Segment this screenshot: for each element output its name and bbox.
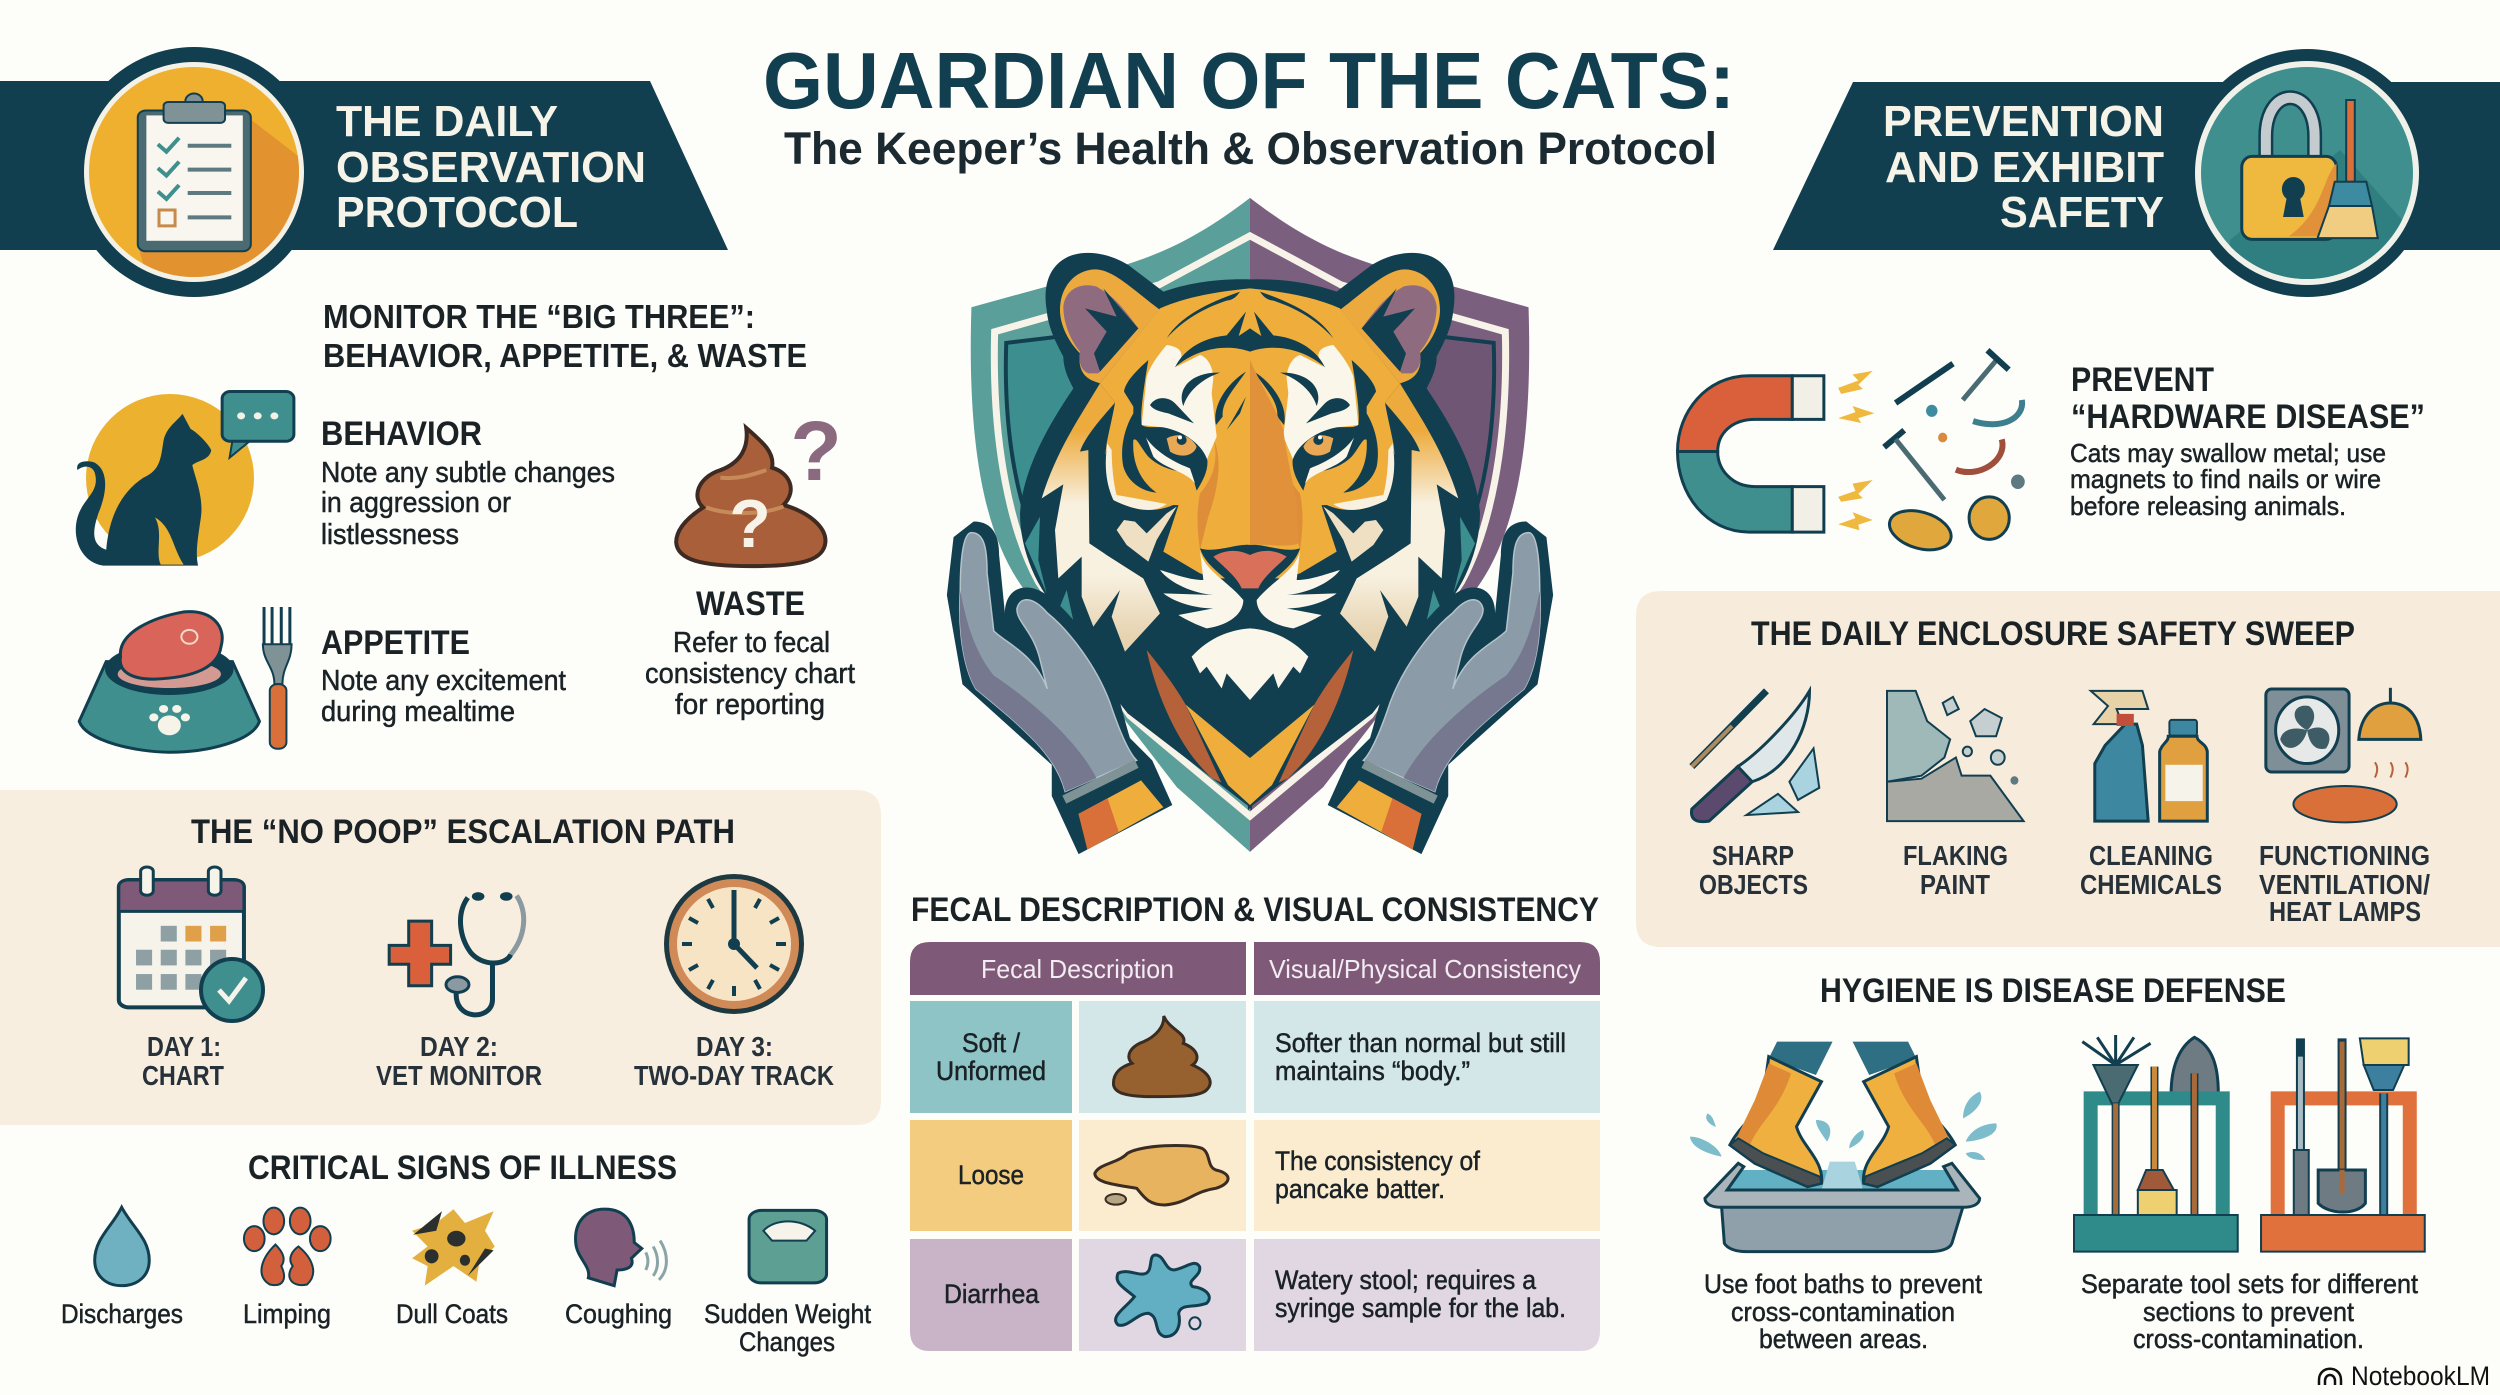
row: soft unformed: Soft / <box>962 1028 1020 1058</box>
icon: cat with speech bubble <box>76 392 294 566</box>
icon: waste pile with question marks <box>676 404 842 566</box>
table header: Visual/Physical Consistency <box>1269 954 1581 984</box>
notebooklm logo: NotebookLM <box>2351 1361 2490 1391</box>
text block: separate tool sets: cross-contamination. <box>2133 1324 2364 1354</box>
heading: escalation path: THE “NO POOP” ESCALATION PATH <box>191 813 735 851</box>
row: loose: Loose <box>958 1160 1024 1190</box>
shield <box>971 198 1529 852</box>
text block: waste <box>645 585 855 721</box>
text block: foot baths: Use foot baths to prevent <box>1704 1269 1982 1299</box>
row: diarrhea <box>910 1239 1600 1351</box>
text block: foot baths <box>1704 1269 1982 1354</box>
text block: behavior <box>321 415 615 551</box>
row: soft unformed: Softer than normal but still <box>1275 1028 1566 1058</box>
title <box>763 36 1735 174</box>
label: day 2 <box>376 1031 542 1091</box>
banner: prevention and exhibit safety <box>1773 49 2500 300</box>
heading: safety sweep: THE DAILY ENCLOSURE SAFETY SWEEP <box>1751 615 2355 653</box>
labels: illness signs: Discharges <box>61 1299 183 1329</box>
row: loose: pancake batter. <box>1275 1174 1445 1204</box>
title: GUARDIAN OF THE CATS: <box>763 36 1735 125</box>
label: day 3 <box>634 1031 834 1091</box>
teal tool rack <box>2074 1035 2238 1252</box>
heading: monitor the big three: MONITOR THE “BIG THREE”: <box>323 298 755 335</box>
labels: illness signs: Coughing <box>565 1299 672 1329</box>
text block: waste: consistency chart <box>645 658 855 690</box>
banner: prevention and exhibit safety: SAFETY <box>2000 188 2164 237</box>
icon: clipboard <box>138 94 251 251</box>
label: ventilation: HEAT LAMPS <box>2269 896 2421 927</box>
text block: prevent hardware disease: before releasing animals. <box>2070 491 2346 521</box>
icon: limping paw <box>244 1208 331 1285</box>
text block: waste: Refer to fecal <box>673 627 830 659</box>
text block: prevent hardware disease: PREVENT <box>2071 361 2214 399</box>
label: sharp objects: SHARP <box>1712 840 1794 871</box>
text block: separate tool sets <box>2081 1269 2418 1354</box>
text block: prevent hardware disease: magnets to find nails or wire <box>2070 464 2381 494</box>
row: loose: The consistency of <box>1275 1146 1480 1176</box>
icon: loose stool <box>1095 1145 1228 1205</box>
label: day 1: DAY 1: <box>147 1031 221 1062</box>
text block: appetite: during mealtime <box>321 696 515 728</box>
icon: meat in bowl and fork <box>79 607 292 752</box>
banner: prevention and exhibit safety: PREVENTION <box>1883 97 2164 146</box>
label: day 1 <box>142 1031 224 1091</box>
gloved hand <box>947 521 1172 854</box>
icon: discharge drop <box>95 1207 149 1286</box>
tiger half <box>947 253 1250 854</box>
icon: dull coat <box>412 1209 495 1286</box>
text block: behavior: Note any subtle changes <box>321 457 615 489</box>
label: day 3: TWO-DAY TRACK <box>634 1060 834 1091</box>
title: The Keeper’s Health & Observation Protocol <box>784 123 1717 174</box>
banner: prevention and exhibit safety: AND EXHIBIT <box>1885 143 2164 192</box>
icon: flaking paint <box>1887 691 2024 821</box>
text block: appetite <box>321 624 566 728</box>
heading: monitor the big three: BEHAVIOR, APPETITE, & WASTE <box>323 337 807 374</box>
icon: calendar <box>119 867 263 1021</box>
text block: prevent hardware disease <box>2070 361 2425 521</box>
icon: weight scale <box>749 1210 827 1283</box>
text block: separate tool sets: sections to prevent <box>2143 1297 2354 1327</box>
nose bridge shading <box>1250 360 1298 546</box>
text block: waste: for reporting <box>675 689 825 721</box>
row: soft unformed <box>910 1001 1600 1113</box>
label: ventilation <box>2259 840 2430 927</box>
text block: behavior: listlessness <box>321 519 459 551</box>
icon: cross and stethoscope <box>389 892 524 1015</box>
banner: the daily observation protocol <box>0 47 728 308</box>
labels: illness signs: Changes <box>739 1327 835 1357</box>
label: flaking paint: FLAKING <box>1903 840 2008 871</box>
text block: foot baths: cross-contamination <box>1731 1297 1955 1327</box>
icon: soft stool <box>1113 1016 1210 1097</box>
center emblem: tiger, shield and gloved hands <box>947 198 1553 854</box>
heading: fecal description: FECAL DESCRIPTION & VISUAL CONSISTENCY <box>911 891 1599 929</box>
row: diarrhea: syringe sample for the lab. <box>1275 1293 1566 1323</box>
text block: separate tool sets: Separate tool sets for different <box>2081 1269 2418 1299</box>
row: loose <box>910 1120 1600 1231</box>
label: cleaning chemicals <box>2080 840 2222 900</box>
table header <box>910 942 1600 995</box>
text block: appetite: APPETITE <box>321 624 470 662</box>
label: cleaning chemicals: CLEANING <box>2089 840 2213 871</box>
labels: illness signs: Dull Coats <box>396 1299 508 1329</box>
icon: waste pile with question marks: ? <box>790 404 842 498</box>
text block: waste: WASTE <box>696 585 805 623</box>
icon: padlock and broom <box>2242 98 2378 239</box>
icon: separate tool sets <box>2074 1035 2425 1252</box>
labels: illness signs: Limping <box>243 1299 331 1329</box>
icon: coughing head <box>576 1209 666 1286</box>
icon: cleaning chemicals <box>2091 691 2207 821</box>
row: soft unformed: maintains “body.” <box>1275 1056 1470 1086</box>
heading: critical signs of illness: CRITICAL SIGNS OF ILLNESS <box>248 1149 677 1187</box>
tiger mirrored half <box>1250 253 1553 854</box>
label: sharp objects: OBJECTS <box>1699 869 1808 900</box>
table: fecal consistency <box>910 942 1600 1351</box>
label: day 2: VET MONITOR <box>376 1060 542 1091</box>
table header: Fecal Description <box>981 954 1174 984</box>
label: flaking paint <box>1903 840 2008 900</box>
icon: ventilation fan and heat lamp <box>2266 688 2421 822</box>
icon: waste pile with question marks: ? <box>729 486 771 562</box>
orange tool rack <box>2261 1038 2425 1252</box>
banner: the daily observation protocol: PROTOCOL <box>336 188 578 237</box>
label: ventilation: VENTILATION/ <box>2259 869 2430 900</box>
text block: prevent hardware disease: “HARDWARE DISEASE” <box>2071 398 2425 436</box>
text block: behavior: BEHAVIOR <box>321 415 482 453</box>
labels: illness signs: Sudden Weight <box>704 1299 871 1329</box>
text block: foot baths: between areas. <box>1759 1324 1928 1354</box>
panel: daily enclosure safety sweep <box>1636 591 2500 947</box>
icon: magnet and metal debris <box>1677 350 2025 556</box>
text block: behavior: in aggression or <box>321 487 511 519</box>
icon: sharp objects <box>1691 691 1819 822</box>
row: diarrhea: Diarrhea <box>944 1279 1040 1309</box>
label: cleaning chemicals: CHEMICALS <box>2080 869 2222 900</box>
label: sharp objects <box>1699 840 1808 900</box>
row: diarrhea: Watery stool; requires a <box>1275 1265 1537 1295</box>
label: day 2: DAY 2: <box>420 1031 498 1062</box>
heading: monitor the big three <box>323 298 807 374</box>
text block: prevent hardware disease: Cats may swallow metal; use <box>2070 438 2386 468</box>
heading: hygiene is disease defense: HYGIENE IS DISEASE DEFENSE <box>1820 972 2286 1010</box>
icon: clock <box>664 874 804 1014</box>
row: soft unformed: Unformed <box>936 1056 1046 1086</box>
banner: the daily observation protocol: THE DAILY <box>336 97 558 146</box>
icon: boots in foot bath <box>1690 1042 1997 1252</box>
label: ventilation: FUNCTIONING <box>2259 840 2430 871</box>
label: flaking paint: PAINT <box>1920 869 1990 900</box>
label: day 1: CHART <box>142 1060 224 1091</box>
banner: the daily observation protocol: OBSERVATION <box>336 143 646 192</box>
panel: no poop escalation path <box>0 790 881 1125</box>
label: day 3: DAY 3: <box>696 1031 773 1062</box>
labels: illness signs <box>61 1299 871 1357</box>
icon: watery splash <box>1116 1255 1209 1337</box>
text block: appetite: Note any excitement <box>321 665 566 697</box>
